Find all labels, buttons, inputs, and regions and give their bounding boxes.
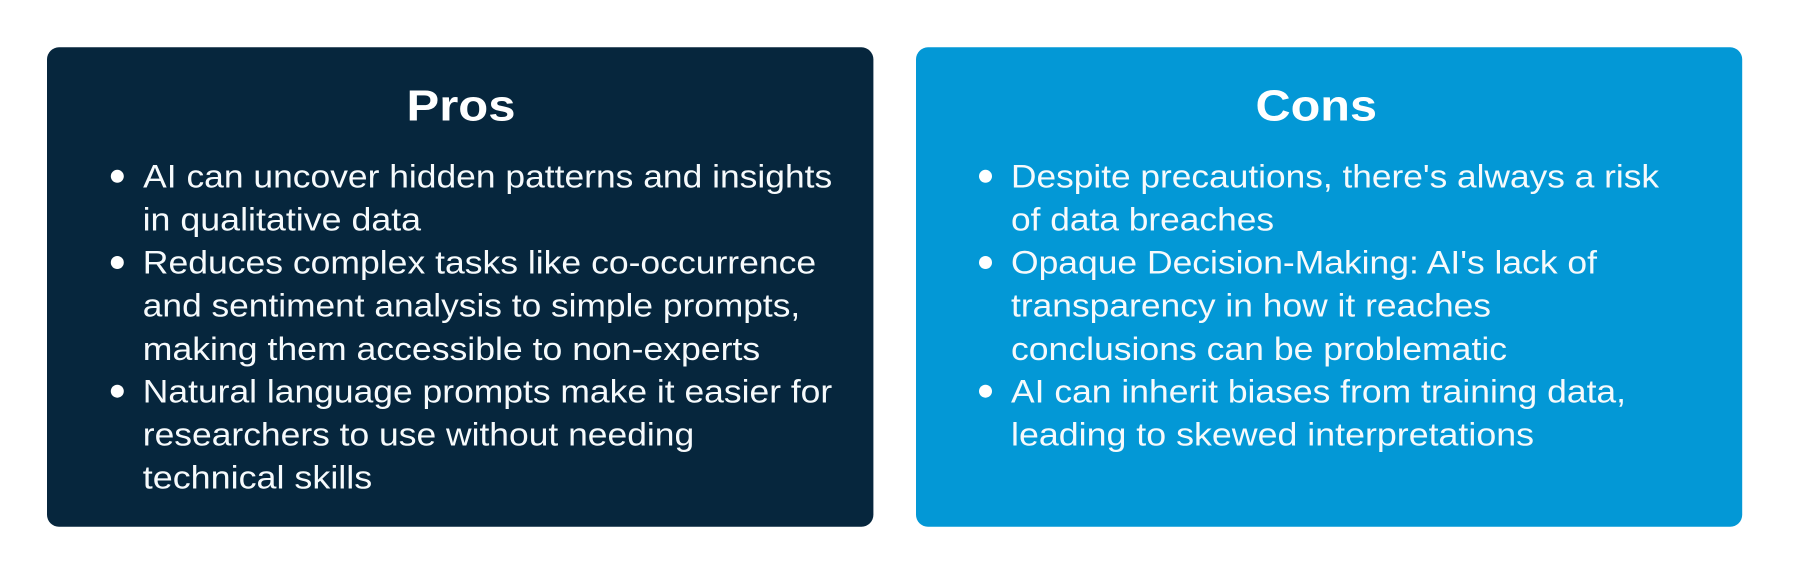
bullet item: natural language: technical skills: [143, 460, 372, 496]
bullet item: hidden patterns: AI can uncover hidden patterns and insights: [143, 158, 832, 194]
bullet item: opaque decision-making: Opaque Decision-Making: AI's lack of: [1011, 245, 1598, 281]
heading: Cons: Cons: [1256, 82, 1377, 130]
bullet item: natural language: Natural language prompts make it easier for: [143, 374, 832, 410]
bullet item: inherited biases: leading to skewed interpretations: [1011, 416, 1534, 452]
bullet item: complex tasks: making them accessible to non-experts: [143, 331, 760, 367]
bullet item: opaque decision-making: [979, 245, 1598, 367]
panel: pros: [47, 47, 873, 527]
bullet item: complex tasks: and sentiment analysis to simple prompts,: [143, 288, 800, 324]
bullet item: inherited biases: AI can inherit biases from training data,: [1011, 374, 1626, 410]
bullet item: natural language: [111, 374, 832, 496]
bullet item: opaque decision-making: conclusions can be problematic: [1011, 331, 1507, 367]
bullet item: data breaches: of data breaches: [1011, 202, 1274, 238]
bullet item: complex tasks: Reduces complex tasks like co-occurrence: [143, 245, 816, 281]
bullet item: opaque decision-making: transparency in how it reaches: [1011, 288, 1491, 324]
bullet item: inherited biases: [979, 374, 1626, 452]
bullet item: complex tasks: [111, 245, 816, 367]
bullet item: data breaches: Despite precautions, there's always a risk: [1011, 158, 1660, 194]
panel: cons: [916, 47, 1742, 527]
bullet item: natural language: researchers to use without needing: [143, 416, 694, 452]
bullet item: hidden patterns: in qualitative data: [143, 202, 422, 238]
heading: Pros: Pros: [406, 82, 516, 130]
bullet item: data breaches: [979, 158, 1660, 238]
bullet item: hidden patterns: [111, 158, 832, 238]
